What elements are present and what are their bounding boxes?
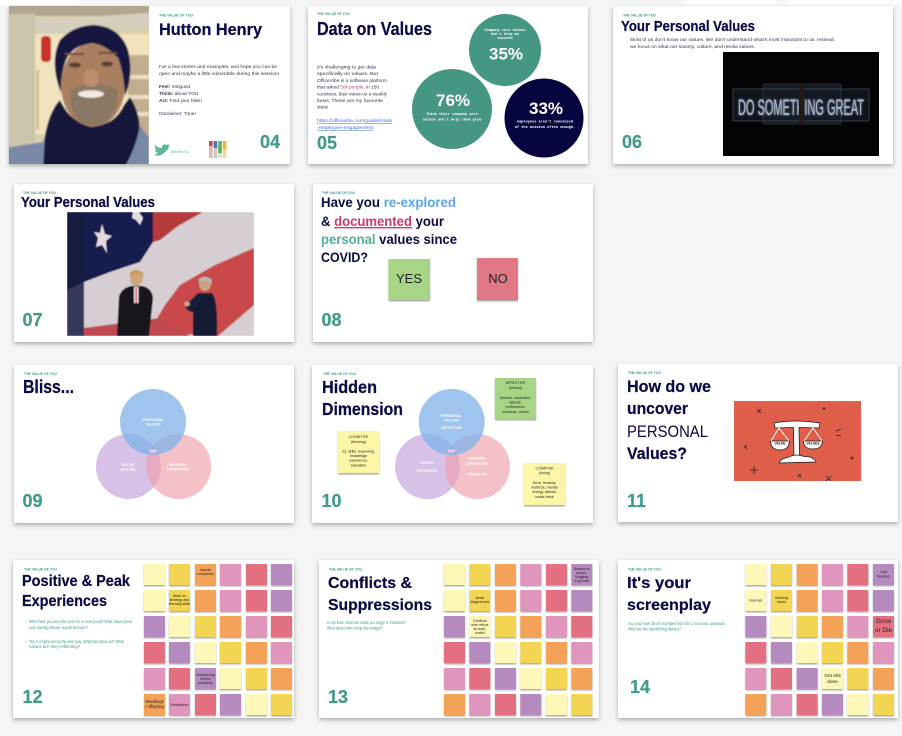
sticky notes text: bugging [575,575,588,579]
sticky notes text: Get shit [824,673,841,679]
sticky: affective: attitude, [509,400,522,404]
sticky notes text: empowering [196,673,214,677]
circle: 35%: succeed [497,36,513,41]
circle: 35%: don't help me [491,32,519,37]
sticky: cognitive: education [351,464,366,468]
sticky notes text: small [476,596,484,600]
sticky: cognitive: knowledge [350,454,367,458]
body text: stats! [317,104,328,110]
body text [630,37,835,50]
prompts [26,619,132,649]
title: Your Personal Values [21,195,155,211]
circle: 35% [469,14,541,86]
sticky: YES [388,259,430,300]
slide 12: Positive and Peak Experiences [13,560,294,718]
slide 11: How do we uncover [618,364,898,522]
sticky: conative [524,463,565,505]
sticky: conative: instincts, mental [532,486,558,490]
twitter handle: @BeenOTA [170,150,190,154]
prompts: The 2-3 highs during the past year. What has stood out? What [29,639,125,644]
sticky: NO: NO [488,271,508,286]
sticky: cognitive: experience, [349,458,368,462]
sticky notes text: power, [577,571,587,575]
slide number: 13 [328,687,348,707]
slide 04: Hutton Henry [5,2,290,172]
circle: 76%: Think their company core [426,112,478,117]
sticky notes text: others [200,677,211,681]
body text: we focus on what our society, culture, and media values. [630,44,755,50]
sticky notes text: Work on [173,594,186,598]
venn diagram: AFFECTIVE [441,426,463,430]
sticky notes text: Improve [749,598,762,602]
kicker: THE VALUE OF YOU [317,12,350,16]
body text: basis. These are my favourite [317,98,383,104]
venn diagram: VALUES [145,422,161,426]
sticky: NO [477,258,518,300]
prompt: What are the overarching themes? [628,626,681,632]
title: Suppressions [328,597,432,614]
sticky notes text: Meditation [171,702,188,707]
slide 14: It's your screenplay [618,560,898,718]
sticky notes text [145,568,214,709]
slide 05: Data on Values [308,6,588,164]
venn diagram [395,389,510,499]
intro text: open and maybe a little vulnerable during this session! [159,71,279,77]
sticky notes text [470,567,590,635]
title [627,377,711,463]
icon: twitter bird [154,144,170,156]
sticky: YES: YES [396,271,422,286]
prompt: In our lives, what has made you angry or frustrated? [327,620,406,625]
illustration: balance scales: VALUE [775,442,786,446]
sticky: conative: energy, talents, [532,490,557,494]
slide number: 08 [322,310,342,330]
kicker: THE VALUE OF YOU [628,371,661,375]
illustration: balance scales [734,401,861,481]
sticky notes text: / offspring [145,704,164,709]
title [22,573,130,610]
photo: flag with two men on stage [67,212,254,336]
sticky notes text: at work, [474,627,486,631]
circle: 33%: of the mission often enough. [515,125,575,130]
slide 13: Conflicts and Suppressions [319,560,599,718]
sticky notes text: learning skills [169,602,190,606]
kicker: THE VALUE OF YOU [322,191,355,195]
sticky: cognitive: (thinking) [351,440,366,444]
body text: specifically on values. But [317,71,379,77]
slide number: 07 [22,310,43,330]
prompts: out during these experiences? [29,625,88,630]
kicker: THE VALUE OF YOU [24,372,57,376]
sticky: conative: CONATIVE [535,466,554,470]
sticky notes text: Grow [876,618,892,625]
circle: 76%: 76% [436,91,470,110]
intro text [159,64,279,117]
slide number: 12 [22,687,43,707]
slide number: 11 [627,491,646,511]
sticky notes text: disagreements [470,600,489,604]
sticky notes text: positively [198,681,213,685]
venn diagram: CONATIVE [467,472,487,476]
link: -employee-engagement [317,125,374,131]
sticky notes text: companies [197,572,214,576]
sticky: affective: AFFECTIVE [506,381,526,385]
slide number: 09 [22,491,43,511]
title: It's your [627,575,691,592]
prompt: You may have 20-40 examples from the 2 in/out two questions. [628,621,726,626]
photo: presenter portrait [9,6,149,164]
body text [317,64,388,110]
kicker: THE VALUE OF YOU [23,191,56,195]
sticky notes text: done [827,679,838,685]
title: Hutton Henry [159,20,263,39]
title: Hidden [322,377,377,397]
title: PERSONAL [627,422,708,441]
venn diagram: (VALUE) [120,468,136,472]
body text: countries, their views on a weekly [317,92,388,98]
illustration: balance scales: VALUES [806,442,820,446]
title: How do we [627,377,711,396]
slide 08: question [313,184,593,342]
body text: OfficeVibe is a software platform [317,78,387,84]
venn diagram: COGNITIVE [417,469,438,473]
circle: 35%: Company core values [485,28,525,33]
link [317,118,392,131]
prompt: What values were being discouraged? [327,626,383,630]
sticky notes text: Lost [880,570,887,574]
slide 06: Your Personal Values [613,6,893,164]
sticky note grid [745,564,894,715]
sticky: affective: preferences, [506,405,525,409]
sticky note grid [444,564,592,715]
question: COVID? [321,250,368,265]
kicker: THE VALUE OF YOU [628,568,661,572]
sticky notes text: Weddings [145,699,164,704]
slide 07: Your Personal Values flag [14,184,294,342]
sticky notes text: Bosses in [574,567,590,571]
title: screenplay [627,597,711,614]
icon: books [209,141,226,158]
title: Bliss... [23,377,74,397]
sticky notes text: freedom [877,574,890,578]
slide 10: Hidden Dimension [312,365,593,523]
title: Values? [627,444,687,463]
kicker: THE VALUE OF YOU [24,568,57,572]
slide number: 05 [317,133,337,153]
venn diagram: STRENGTHS [465,462,489,466]
circle: 76% [412,69,492,149]
intro text: Disclaimer: Time! [159,111,196,117]
kicker: THE VALUE OF YOU [159,14,193,18]
title: Data on Values [317,19,432,39]
sticky: affective: emotions, values [502,410,529,414]
slide 09: Bliss [14,365,294,523]
prompts: values are they reflecting? [29,644,81,649]
title: Experiences [22,593,107,610]
title: Conflicts & [328,575,412,592]
sticky notes text [749,570,893,685]
question: personal values since [321,232,457,247]
venn diagram: PERSONAL [142,418,164,422]
sticky notes text: Include [200,568,211,572]
intro text: Think: about YOU [159,91,199,97]
circle: 76%: values won't help them grow [423,118,482,122]
body text: Most of us don't know our values. We don't understand what's most important to us. Instead, [630,37,835,43]
slide number: 14 [630,677,650,697]
question [321,195,457,265]
venn diagram [96,389,211,499]
photo: neon sign [723,52,879,156]
prompt [327,620,406,630]
sticky: conative: inside track [535,495,554,499]
sticky: affective [495,378,536,419]
sticky notes text: Working [775,596,788,600]
sticky notes text: strategy and [170,598,189,602]
venn diagram: ROLES [420,461,434,465]
sticky: affective: (feeling) [509,386,522,390]
prompts: When have you been the most fun or most proud? What values stood [29,619,132,624]
venn diagram: NATURAL [169,463,188,467]
prompt [628,621,726,632]
sticky: affective: Desires, motivation, [500,396,531,400]
circle: 35%: 35% [489,44,523,64]
kicker: THE VALUE OF YOU [623,14,656,18]
question: & documented your [321,214,445,229]
sticky notes text: hurtful [475,631,485,635]
venn diagram: NATURAL [468,456,487,460]
circle: 33% [504,78,584,158]
title: Your Personal Values [621,19,755,35]
title: Positive & Peak [22,573,130,590]
slide number: 06 [622,132,642,152]
sticky: conative: (doing) [539,471,550,475]
venn diagram: PERSONAL [441,414,463,418]
sticky: cognitive: IQ, skills, reasoning, [342,450,375,454]
body text: It's challenging to get data [317,64,376,70]
kicker: THE VALUE OF YOU [323,372,356,376]
sticky: cognitive [338,431,379,473]
link: https://officevibe.com/guides/state [317,118,392,124]
body text: that asked 50k people, in 150 [317,84,379,90]
title [627,575,711,614]
sticky notes text: Conflicts [473,619,487,623]
slide number: 04 [260,132,280,152]
title [322,377,403,419]
kicker: THE VALUE OF YOU [329,568,362,572]
sticky: conative: Drive, tenacity, [533,481,556,485]
title [328,575,432,614]
intro text: I've a few stories and examples, and hope you can be [159,64,277,70]
intro text: Act: Find your bliss! [159,98,202,104]
circle: 33%: employees aren't convinced [517,120,573,124]
venn diagram: ROLES [121,463,135,467]
title: uncover [627,399,688,418]
sticky notes text: or Die [875,627,893,634]
slide number: 10 [322,491,342,511]
venn diagram: VALUES [444,418,460,422]
intro text: Feel: Intrigued [159,84,191,90]
question: Have you re-explored [321,195,456,210]
title: Dimension [322,399,403,419]
circle: 33%: 33% [529,99,563,118]
sticky notes text: frog bowl [575,579,589,583]
venn diagram: STRENGTHS [166,468,190,472]
sticky notes text: hours [777,600,786,604]
sticky: cognitive: COGNITIVE [349,435,369,439]
sticky note grid [144,564,292,715]
sticky notes text: over ethics [471,623,489,627]
